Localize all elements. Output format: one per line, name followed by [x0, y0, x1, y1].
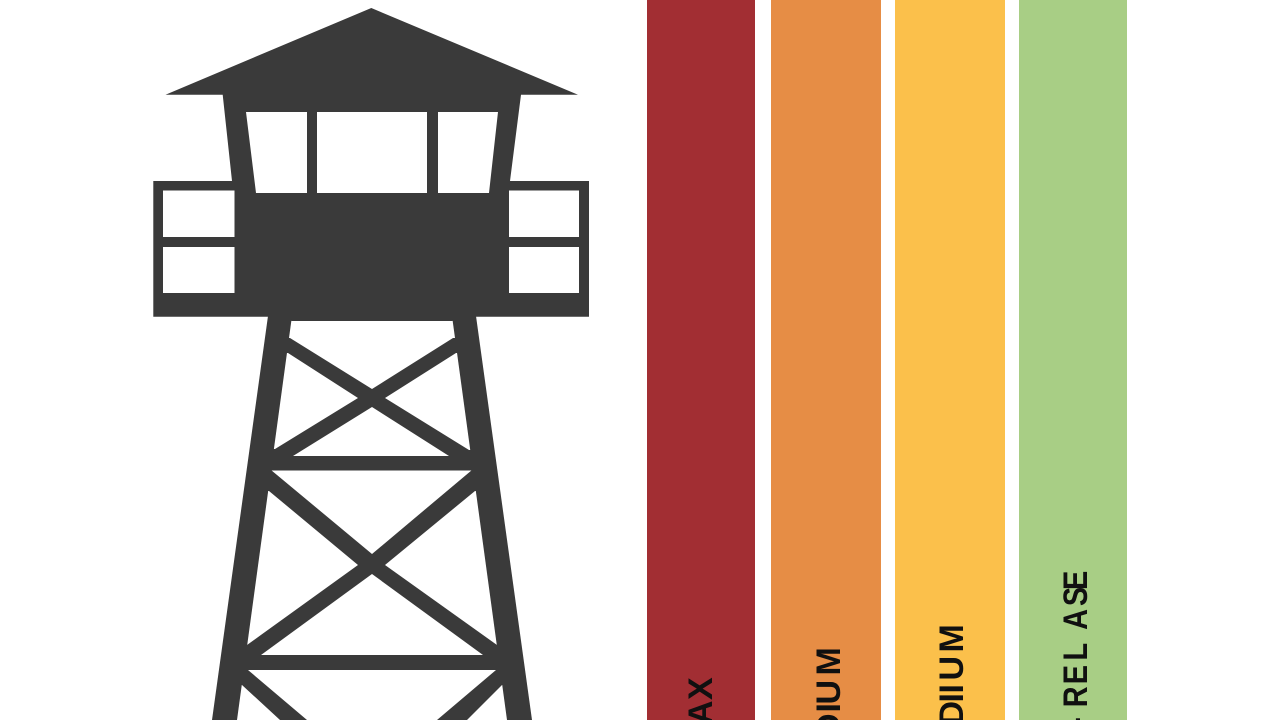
- bar: medium yellow: [895, 0, 1005, 720]
- tower right leg: [452, 316, 532, 720]
- lower horizontal beam: [240, 655, 504, 670]
- bar: release green: [1019, 0, 1127, 720]
- upper cross bracing: [266, 338, 478, 456]
- icon: watchtower: [153, 8, 589, 720]
- bar: medium orange: [771, 0, 881, 720]
- bottom cross bracing right: [437, 670, 505, 720]
- bar: max: [647, 0, 755, 720]
- tower cabin and roof: [153, 8, 589, 321]
- lower cross bracing: [240, 470, 505, 655]
- bottom cross bracing: [240, 670, 307, 720]
- tower left leg: [212, 316, 292, 720]
- upper horizontal beam: [265, 456, 479, 470]
